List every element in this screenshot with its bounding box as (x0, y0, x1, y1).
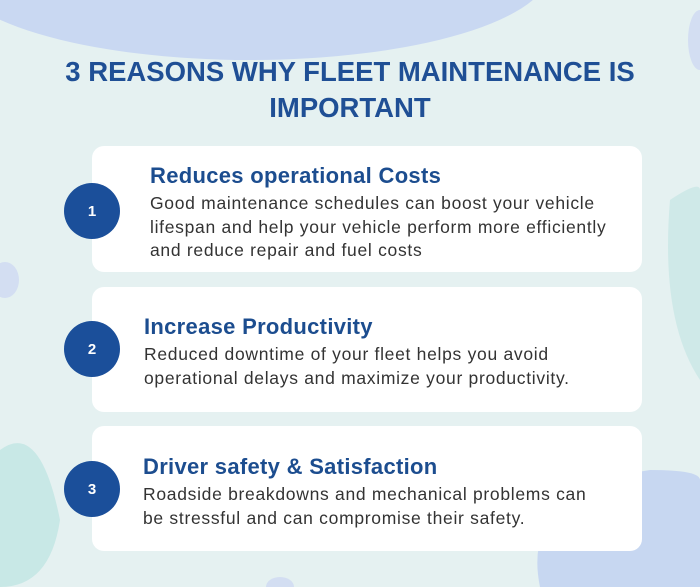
heading 2: Increase Productivity (144, 314, 373, 339)
text 2: Reduced downtime of your fleet helps you avoid (144, 344, 549, 364)
circle 1 (64, 183, 120, 239)
text 3 (143, 484, 586, 528)
card 3 (92, 426, 642, 551)
text 1 (150, 193, 606, 260)
title: 3 REASONS WHY FLEET MAINTENANCE IS (65, 56, 635, 87)
title: IMPORTANT (269, 92, 431, 123)
text 2 (144, 344, 570, 388)
heading 1: Reduces operational Costs (150, 163, 441, 188)
circle 1: 1 (88, 202, 96, 220)
circle 3 (64, 461, 120, 517)
text 2: operational delays and maximize your productivity. (144, 368, 570, 388)
circle 2 (64, 321, 120, 377)
card 2 (92, 287, 642, 412)
text 1: and reduce repair and fuel costs (150, 240, 422, 260)
title (65, 56, 635, 123)
circle 2: 2 (88, 340, 96, 358)
heading 3: Driver safety & Satisfaction (143, 454, 438, 479)
circle 3: 3 (88, 480, 96, 498)
text 3: be stressful and can compromise their safety. (143, 508, 525, 528)
text 1: lifespan and help your vehicle perform more efficiently (150, 216, 606, 236)
text 3: Roadside breakdowns and mechanical problems can (143, 484, 586, 504)
card 1 (92, 146, 642, 272)
text 1: Good maintenance schedules can boost your vehicle (150, 193, 595, 213)
